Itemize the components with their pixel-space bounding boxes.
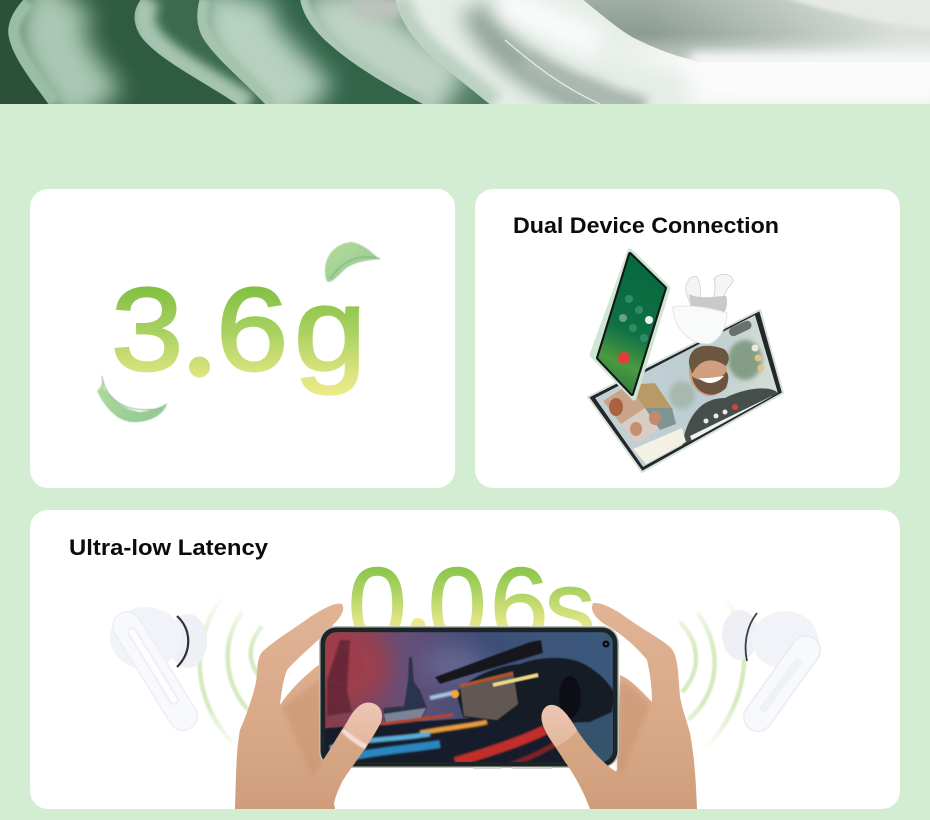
sound waves right [680,600,744,748]
right earbud [722,610,818,717]
right thumb [542,705,640,809]
icon: upper feather [325,242,380,282]
right hand [592,603,697,809]
latency value [348,547,595,664]
racing game screen [325,632,613,762]
left thumb [295,703,382,809]
panel: ultra-low latency [30,510,900,809]
weight value: . [194,307,215,386]
icon: lower feather [97,376,167,422]
latency value: 0 [428,547,486,664]
latency value: 0 [348,547,406,664]
weight value [111,264,366,396]
tablet with video call [588,310,790,472]
smartphone with call screen [592,251,668,398]
charging case with earbuds [673,274,733,344]
weight value: 3 [111,264,183,396]
top banner: flowing green waves [0,0,930,110]
panel: weight [30,189,455,488]
heading: dual device connection: Dual Device Connection [513,213,779,238]
toolbar [690,396,772,440]
sound waves left [200,598,262,742]
weight value: g [294,264,366,396]
latency value: 6 [490,547,548,664]
latency value: . [414,578,431,645]
video thumbnails [603,383,676,444]
weight value: 6 [216,264,288,396]
panel: dual device connection [475,189,900,488]
latency value: s [545,551,595,663]
left hand [235,604,343,809]
chat box [633,428,686,464]
game phone [300,625,620,770]
left earbud [110,607,207,716]
soft white highlight [645,48,696,72]
heading: ultra-low latency: Ultra-low Latency [69,535,269,560]
